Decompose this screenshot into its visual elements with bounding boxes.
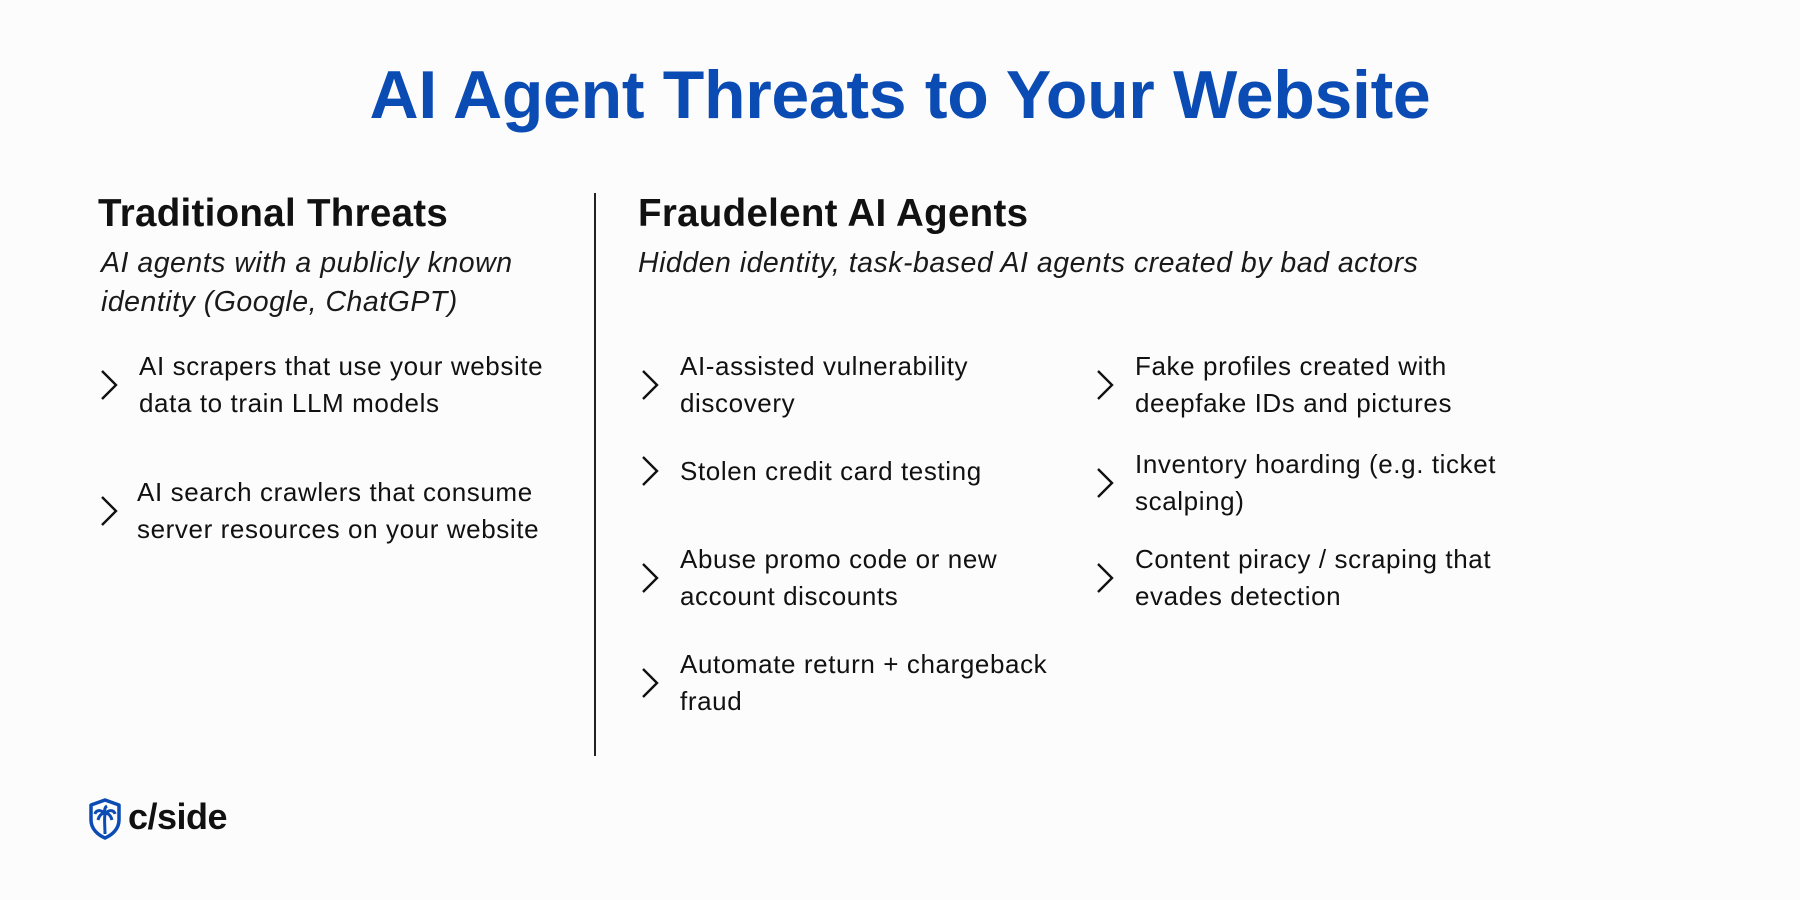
item: vulnerability: discovery — [680, 388, 795, 418]
item: fake profiles: deepfake IDs and pictures — [1135, 388, 1452, 418]
divider — [594, 193, 596, 756]
item: crawlers: AI search crawlers that consume — [137, 477, 533, 507]
item: promo — [642, 544, 997, 611]
panel: traditional threats — [98, 192, 543, 544]
item: promo: account discounts — [680, 581, 898, 611]
heading: traditional: Traditional Threats — [98, 192, 448, 235]
item: inventory: scalping) — [1135, 486, 1244, 516]
subtitle: traditional: AI agents with a publicly known identity (Google, ChatGPT) — [101, 247, 513, 318]
item: scrapers: AI scrapers that use your website — [139, 351, 543, 381]
panel: fraudulent AI agents — [638, 192, 1496, 716]
item: promo: Abuse promo code or new — [680, 544, 997, 574]
item: scrapers — [101, 351, 543, 418]
item: vulnerability: AI-assisted vulnerability — [680, 351, 968, 381]
item: crawlers — [101, 477, 539, 544]
item: piracy: evades detection — [1135, 581, 1341, 611]
item: crawlers: server resources on your website — [137, 514, 539, 544]
item: vulnerability — [642, 351, 968, 418]
title: AI Agent Threats to Your Website — [370, 57, 1430, 133]
item: chargeback: fraud — [680, 686, 742, 716]
heading: fraudulent: Fraudelent AI Agents — [638, 192, 1028, 235]
item: fake profiles: Fake profiles created with — [1135, 351, 1447, 381]
item: piracy — [1097, 544, 1491, 611]
item: chargeback: Automate return + chargeback — [680, 649, 1047, 679]
item: scrapers: data to train LLM models — [139, 388, 440, 418]
logo text: c/side — [128, 796, 227, 837]
item: credit card: Stolen credit card testing — [680, 456, 982, 486]
subtitle: fraudulent: Hidden identity, task-based AI agents created by bad actors — [638, 247, 1418, 279]
item: piracy: Content piracy / scraping that — [1135, 544, 1491, 574]
item: inventory — [1097, 449, 1496, 516]
logo: cside — [89, 796, 227, 840]
icon: shield palm — [89, 798, 121, 840]
item: inventory: Inventory hoarding (e.g. ticket — [1135, 449, 1496, 479]
item: chargeback — [642, 649, 1047, 716]
item: fake profiles — [1097, 351, 1452, 418]
